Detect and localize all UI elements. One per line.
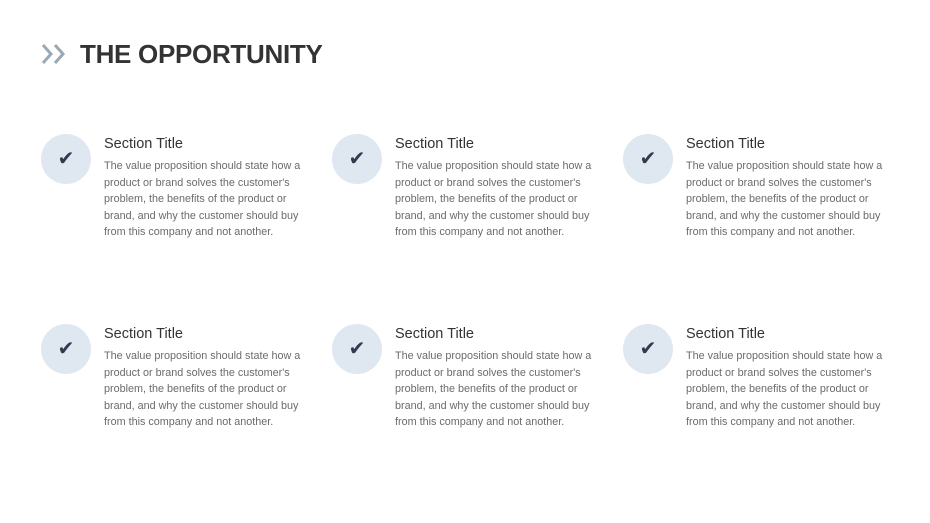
item 6 — [623, 324, 882, 428]
item 2 — [332, 134, 592, 238]
item 1 — [41, 134, 300, 238]
item 1: from this company and not another. — [104, 226, 273, 238]
item 6: ✔ — [640, 336, 656, 360]
item 6: The value proposition should state how a — [686, 350, 882, 362]
item 6: from this company and not another. — [686, 416, 855, 428]
item 4: brand, and why the customer should buy — [104, 400, 298, 412]
item 2: problem, the benefits of the product or — [395, 193, 577, 205]
item 5: The value proposition should state how a — [395, 350, 591, 362]
item 5: brand, and why the customer should buy — [395, 400, 589, 412]
item 4: The value proposition should state how a — [104, 350, 300, 362]
item 4 — [41, 324, 300, 428]
item 3: from this company and not another. — [686, 226, 855, 238]
item 5: from this company and not another. — [395, 416, 564, 428]
icon: chevrons — [42, 44, 65, 64]
item 2: product or brand solves the customer's — [395, 177, 581, 189]
item 6: problem, the benefits of the product or — [686, 383, 868, 395]
title: THE OPPORTUNITY — [80, 39, 323, 69]
item 5: product or brand solves the customer's — [395, 367, 581, 379]
item 5: Section Title — [395, 326, 474, 342]
item 1: Section Title — [104, 136, 183, 152]
item 4: Section Title — [104, 326, 183, 342]
item 2: brand, and why the customer should buy — [395, 210, 589, 222]
item 1: ✔ — [58, 146, 74, 170]
item 1: The value proposition should state how a — [104, 160, 300, 172]
item 2: Section Title — [395, 136, 474, 152]
item 5: ✔ — [349, 336, 365, 360]
item 4: product or brand solves the customer's — [104, 367, 290, 379]
item 3: ✔ — [640, 146, 656, 170]
item 4: problem, the benefits of the product or — [104, 383, 286, 395]
item 5 — [332, 324, 592, 428]
item 2: from this company and not another. — [395, 226, 564, 238]
item 3 — [623, 134, 882, 238]
item 4: from this company and not another. — [104, 416, 273, 428]
item 3: Section Title — [686, 136, 765, 152]
item 3: problem, the benefits of the product or — [686, 193, 868, 205]
item 6: brand, and why the customer should buy — [686, 400, 880, 412]
item 6: product or brand solves the customer's — [686, 367, 872, 379]
item 1: brand, and why the customer should buy — [104, 210, 298, 222]
item 3: The value proposition should state how a — [686, 160, 882, 172]
item 4: ✔ — [58, 336, 74, 360]
item 3: brand, and why the customer should buy — [686, 210, 880, 222]
item 1: product or brand solves the customer's — [104, 177, 290, 189]
item 2: The value proposition should state how a — [395, 160, 591, 172]
item 1: problem, the benefits of the product or — [104, 193, 286, 205]
item 5: problem, the benefits of the product or — [395, 383, 577, 395]
item 3: product or brand solves the customer's — [686, 177, 872, 189]
item 6: Section Title — [686, 326, 765, 342]
item 2: ✔ — [349, 146, 365, 170]
